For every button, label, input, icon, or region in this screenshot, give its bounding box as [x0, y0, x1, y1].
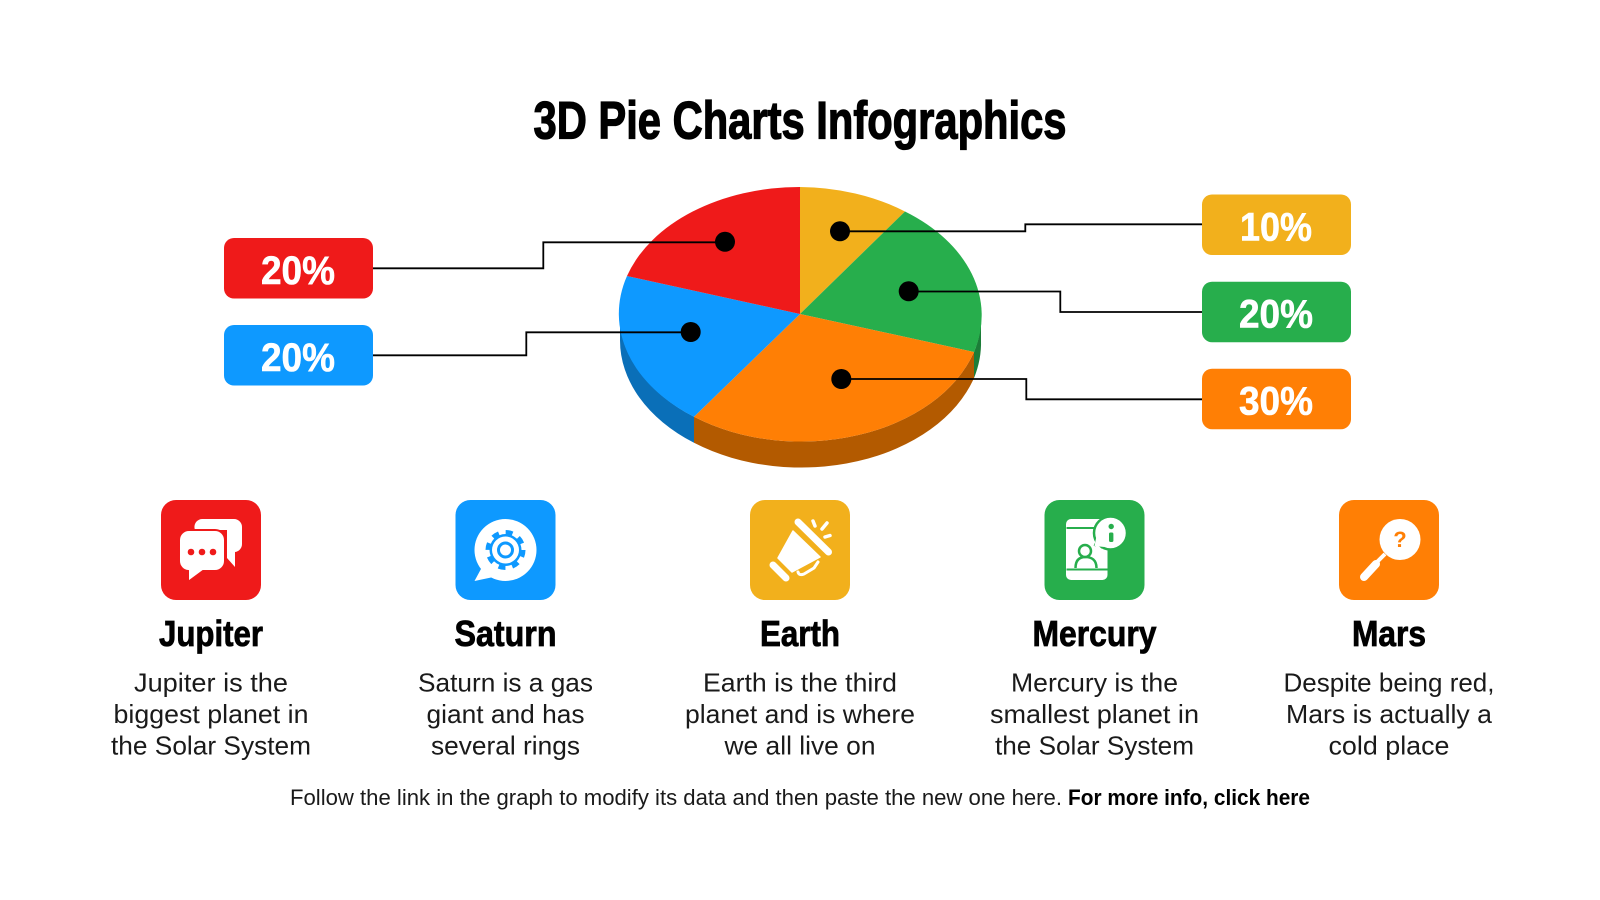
slice: yellow 10%	[800, 187, 905, 314]
pie side: orange	[694, 352, 974, 468]
planet: Saturn	[418, 613, 593, 760]
planet: Mars	[1284, 613, 1494, 760]
planet: Saturn: Saturn is a gas	[418, 670, 593, 698]
title: 3D Pie Charts Infographics	[534, 92, 1066, 150]
planet: Saturn: Saturn	[454, 613, 556, 654]
slice: orange 30%	[694, 314, 974, 442]
planet: Saturn: several rings	[431, 732, 580, 760]
slice: red 20%	[627, 187, 800, 314]
planet: Mars: Mars	[1352, 613, 1426, 654]
planet: Mercury: Mercury is the	[1011, 670, 1178, 698]
planet: Saturn: giant and has	[426, 701, 584, 729]
icon: chat bubbles	[161, 500, 261, 600]
callout: orange 30%	[831, 369, 1351, 429]
footer note: Follow the link in the graph to modify its data and then paste the new one here.	[290, 785, 1062, 810]
slice: blue 20%	[619, 276, 800, 417]
planet: Jupiter: Jupiter	[159, 613, 263, 654]
icon: magnifier with question mark	[1339, 500, 1439, 600]
callout: blue 20%	[224, 322, 701, 386]
callout: green 20%	[899, 281, 1351, 342]
callout: yellow 10%: 10%	[1240, 205, 1312, 249]
pie side: green	[974, 314, 981, 378]
planet: Mars: cold place	[1328, 732, 1450, 760]
planet: Mercury: the Solar System	[995, 732, 1194, 760]
planet: Earth	[685, 613, 915, 760]
callout: blue 20%: 20%	[261, 336, 335, 380]
icon: phone with info bubble	[1044, 500, 1144, 600]
planet: Earth: planet and is where	[685, 701, 915, 729]
planet: Mercury: Mercury	[1032, 613, 1156, 654]
icon: megaphone	[750, 500, 850, 600]
icon: gear in speech bubble	[456, 500, 556, 600]
callout: green 20%: 20%	[1239, 293, 1313, 337]
planet: Jupiter: Jupiter is the	[134, 670, 288, 698]
planet: Mercury	[990, 613, 1199, 760]
3D pie chart	[619, 187, 982, 468]
callout: red 20%: 20%	[261, 249, 335, 293]
footer note: For more info, click here	[1068, 785, 1310, 810]
planet: Earth: we all live on	[723, 732, 876, 760]
icon: magnifier with question mark: ?	[1393, 527, 1407, 552]
callout: orange 30%: 30%	[1239, 380, 1313, 424]
callout: yellow 10%	[830, 194, 1351, 255]
planet: Mars: Mars is actually a	[1286, 701, 1493, 729]
slice: green 20%	[800, 212, 982, 352]
planet: Mercury: smallest planet in	[990, 701, 1199, 729]
planet: Jupiter	[111, 613, 311, 760]
planet: Earth: Earth	[760, 613, 840, 654]
planet: Mars: Despite being red,	[1284, 670, 1494, 698]
callout: red 20%	[224, 232, 735, 298]
planet: Jupiter: biggest planet in	[114, 701, 308, 729]
pie side: blue	[620, 314, 694, 443]
planet: Jupiter: the Solar System	[111, 732, 311, 760]
planet: Earth: Earth is the third	[703, 670, 897, 698]
